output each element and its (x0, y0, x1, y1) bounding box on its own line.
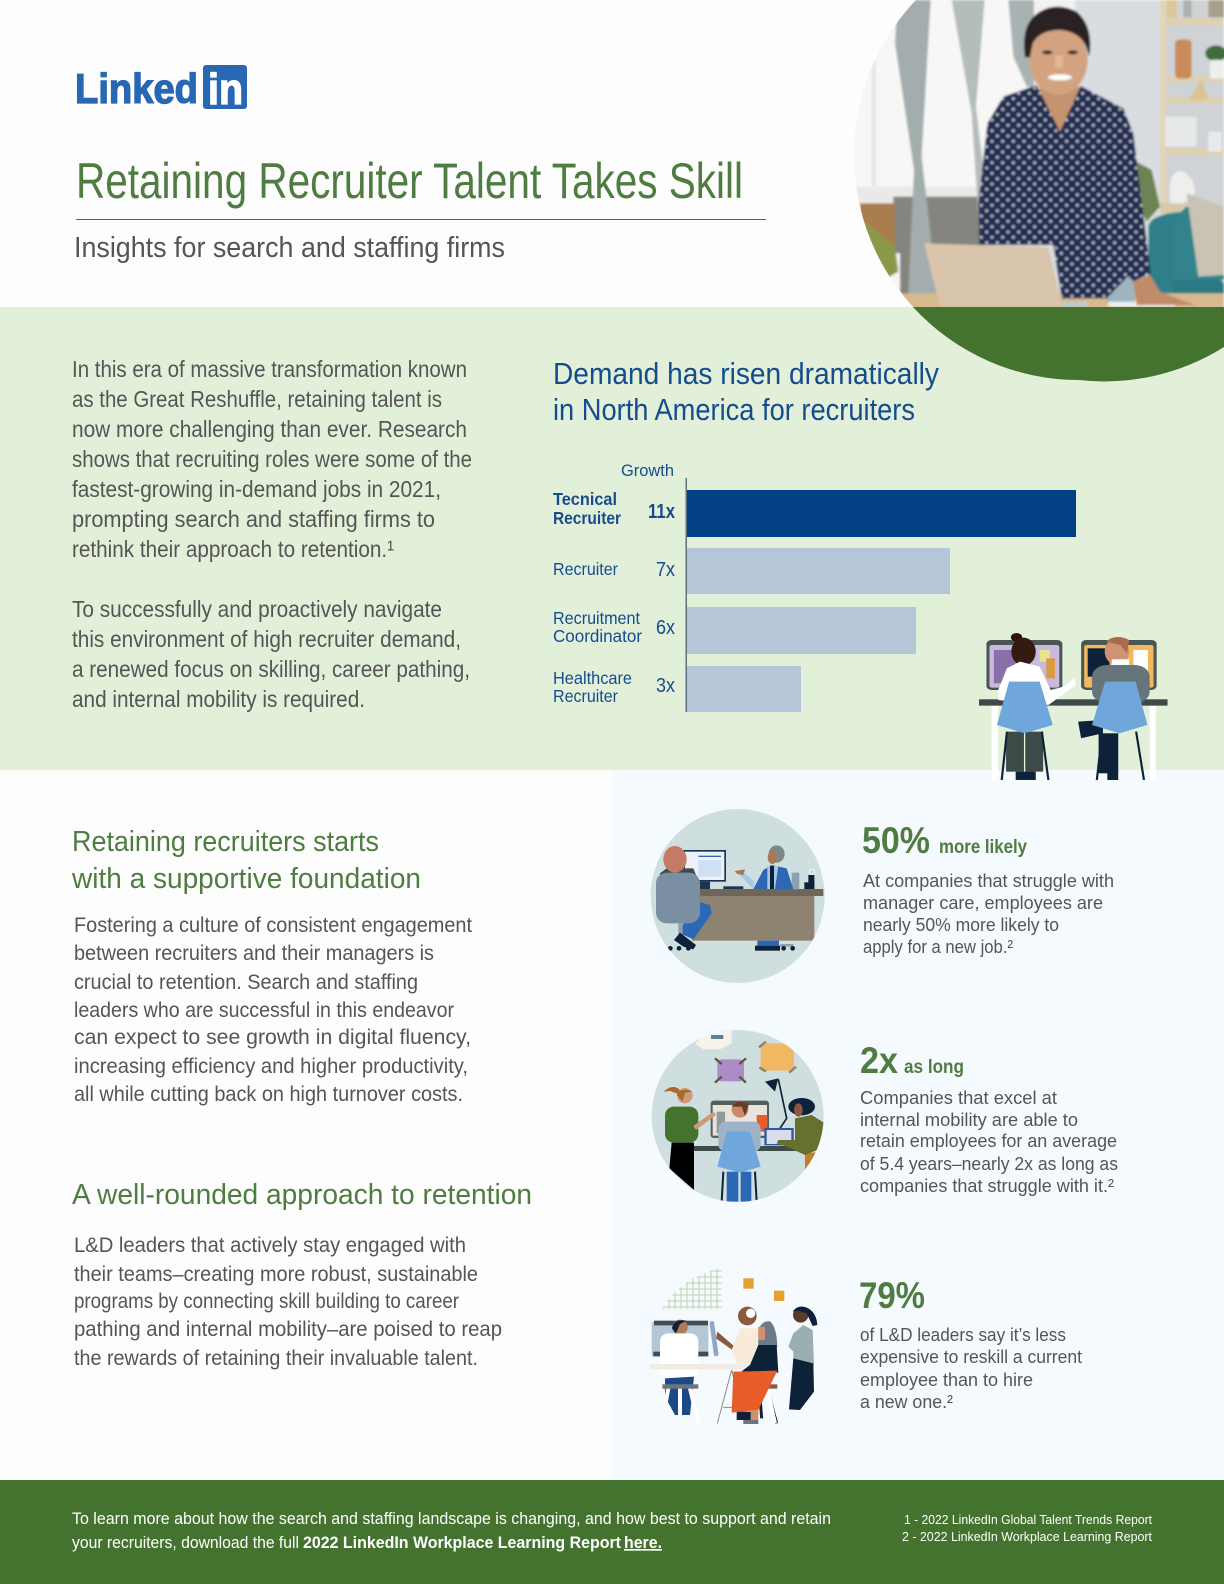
panel: green intro band (0, 307, 1224, 770)
footer call to action (72, 1510, 831, 1552)
text block: well-rounded approach: their teams–creating more robust, sustainable (74, 1263, 478, 1286)
bar: Recruitment Coordinator 6x: Recruitment (553, 608, 640, 628)
bar: Recruitment Coordinator 6x: 6x (656, 617, 675, 639)
bar: Healthcare Recruiter 3x: Recruiter (553, 686, 618, 706)
text block: introduction: this environment of high recruiter demand, (72, 626, 461, 652)
text block: supportive foundation: between recruiters and their managers is (74, 942, 434, 965)
statistic: 2x as long: as long (904, 1057, 964, 1078)
statistic: 2x as long: retain employees for an average (860, 1130, 1117, 1151)
logo: LinkedIn: in (208, 65, 243, 114)
chart heading: in North America for recruiters (553, 392, 915, 427)
footer call to action: here. (624, 1534, 662, 1552)
bar: Recruitment Coordinator 6x (553, 607, 916, 654)
text block: introduction: prompting search and staffing firms to (72, 506, 435, 532)
bar: Tecnical Recruiter 11x (553, 489, 1076, 537)
text block: introduction (72, 356, 472, 712)
bar: Recruiter 7x (553, 548, 950, 594)
footer references: 1 - 2022 LinkedIn Global Talent Trends Report (904, 1512, 1152, 1527)
statistic: 50% more likely: apply for a new job.² (863, 936, 1013, 957)
text block: introduction: To successfully and proactively navigate (72, 596, 442, 622)
heading: supportive foundation: with a supportive foundation (71, 863, 421, 895)
title: Retaining Recruiter Talent Takes Skill (76, 153, 743, 209)
text block: introduction: In this era of massive transformation known (72, 356, 467, 382)
text block: well-rounded approach (74, 1234, 502, 1370)
footer call to action: 2022 LinkedIn Workplace Learning Report (303, 1534, 621, 1552)
hero photo: woman at laptop in a circle (840, 0, 1224, 310)
text block: introduction: as the Great Reshuffle, retaining talent is (72, 386, 442, 412)
heading: well-rounded approach: A well-rounded approach to retention (72, 1179, 532, 1211)
heading: supportive foundation (71, 826, 421, 895)
text block: well-rounded approach: the rewards of retaining their invaluable talent. (74, 1347, 478, 1370)
illustration: team collaborating at desk (652, 1030, 825, 1202)
bar: Healthcare Recruiter 3x: 3x (656, 675, 675, 697)
bar: Healthcare Recruiter 3x: Healthcare (553, 668, 632, 688)
text block: supportive foundation: crucial to retention. Search and staffing (74, 971, 418, 994)
text block: supportive foundation: all while cutting back on high turnover costs. (74, 1083, 463, 1106)
text block: introduction: shows that recruiting roles were some of the (72, 446, 472, 472)
text block: well-rounded approach: L&D leaders that actively stay engaged with (74, 1234, 466, 1257)
text block: supportive foundation: can expect to see growth in digital fluency, (74, 1026, 471, 1049)
bar: Tecnical Recruiter 11x: Recruiter (553, 508, 621, 528)
illustration: two people at computers (979, 633, 1168, 780)
statistic: 79% (859, 1275, 1082, 1412)
statistic: 79%: employee than to hire (860, 1369, 1033, 1390)
panel: light blue statistics background (612, 770, 1224, 1480)
text block: well-rounded approach: pathing and internal mobility–are poised to reap (74, 1318, 502, 1341)
footer references (902, 1512, 1152, 1544)
text block: introduction: fastest-growing in-demand jobs in 2021, (72, 476, 441, 502)
footer call to action: your recruiters, download the full (72, 1534, 299, 1552)
illustration: manager meeting with employee (651, 809, 825, 983)
statistic: 2x as long: 2x (860, 1040, 898, 1081)
statistic: 2x as long: internal mobility are able to (860, 1109, 1078, 1130)
bar: Recruitment Coordinator 6x: Coordinator (553, 626, 642, 646)
text block: introduction: and internal mobility is required. (72, 686, 365, 712)
text block: supportive foundation: Fostering a culture of consistent engagement (74, 914, 472, 937)
dark green half circle (913, 307, 1224, 381)
statistic: 2x as long: companies that struggle with it.² (860, 1175, 1114, 1196)
text block: supportive foundation: leaders who are successful in this endeavor (74, 999, 454, 1022)
statistic: 79%: 79% (859, 1275, 925, 1316)
illustration: colleagues around a shared table (650, 1267, 817, 1424)
text block: supportive foundation: increasing efficiency and higher productivity, (74, 1055, 468, 1078)
footer call to action: To learn more about how the search and staffing landscape is changing, and how best to support and retain (72, 1510, 831, 1528)
footer references: 2 - 2022 LinkedIn Workplace Learning Report (902, 1529, 1152, 1544)
statistic: 79%: of L&D leaders say it’s less (860, 1324, 1066, 1345)
statistic: 2x as long (860, 1040, 1118, 1196)
statistic: 50% more likely (862, 820, 1114, 957)
bar: Healthcare Recruiter 3x (553, 666, 801, 712)
chart heading (553, 356, 939, 427)
text block: introduction: rethink their approach to retention.¹ (72, 536, 394, 562)
text block: introduction: a renewed focus on skilling, career pathing, (72, 656, 470, 682)
statistic: 50% more likely: more likely (939, 837, 1027, 858)
statistic: 50% more likely: At companies that struggle with (863, 870, 1114, 891)
bar: Recruiter 7x: Recruiter (553, 559, 618, 579)
footer (0, 1480, 1224, 1584)
text block: supportive foundation (74, 914, 472, 1106)
statistic: 79%: expensive to reskill a current (860, 1346, 1082, 1367)
logo: LinkedIn: Linked (75, 65, 198, 112)
statistic: 50% more likely: 50% (862, 820, 930, 861)
statistic: 2x as long: Companies that excel at (860, 1087, 1057, 1108)
statistic: 50% more likely: manager care, employees are (863, 892, 1103, 913)
statistic: 2x as long: of 5.4 years–nearly 2x as long as (860, 1153, 1118, 1174)
bar: Tecnical Recruiter 11x: Tecnical (553, 489, 617, 509)
subtitle: Insights for search and staffing firms (74, 232, 505, 264)
bar: Tecnical Recruiter 11x: 11x (648, 501, 675, 523)
heading: supportive foundation: Retaining recruiters starts (72, 826, 379, 858)
bar chart: growth by role: Growth (621, 461, 674, 480)
title rule (76, 219, 766, 220)
text block: introduction: now more challenging than ever. Research (72, 416, 467, 442)
chart heading: Demand has risen dramatically (553, 356, 939, 391)
bar: Recruiter 7x: 7x (656, 559, 675, 581)
text block: well-rounded approach: programs by connecting skill building to career (74, 1290, 459, 1313)
statistic: 50% more likely: nearly 50% more likely to (863, 914, 1059, 935)
statistic: 79%: a new one.² (860, 1391, 953, 1412)
bar chart: growth by role (553, 461, 1076, 712)
